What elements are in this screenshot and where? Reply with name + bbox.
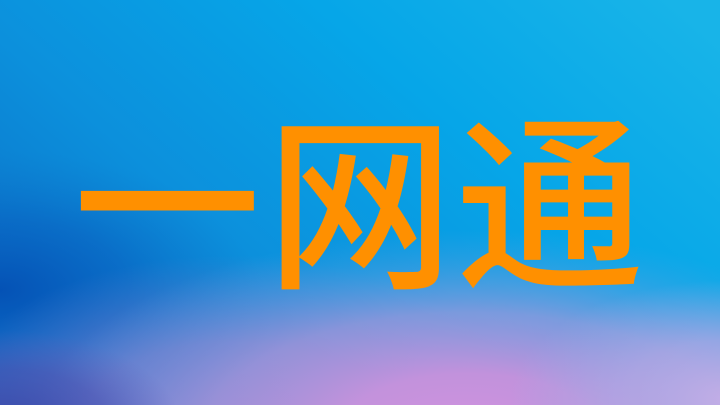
title: 一网通 xyxy=(73,109,644,309)
